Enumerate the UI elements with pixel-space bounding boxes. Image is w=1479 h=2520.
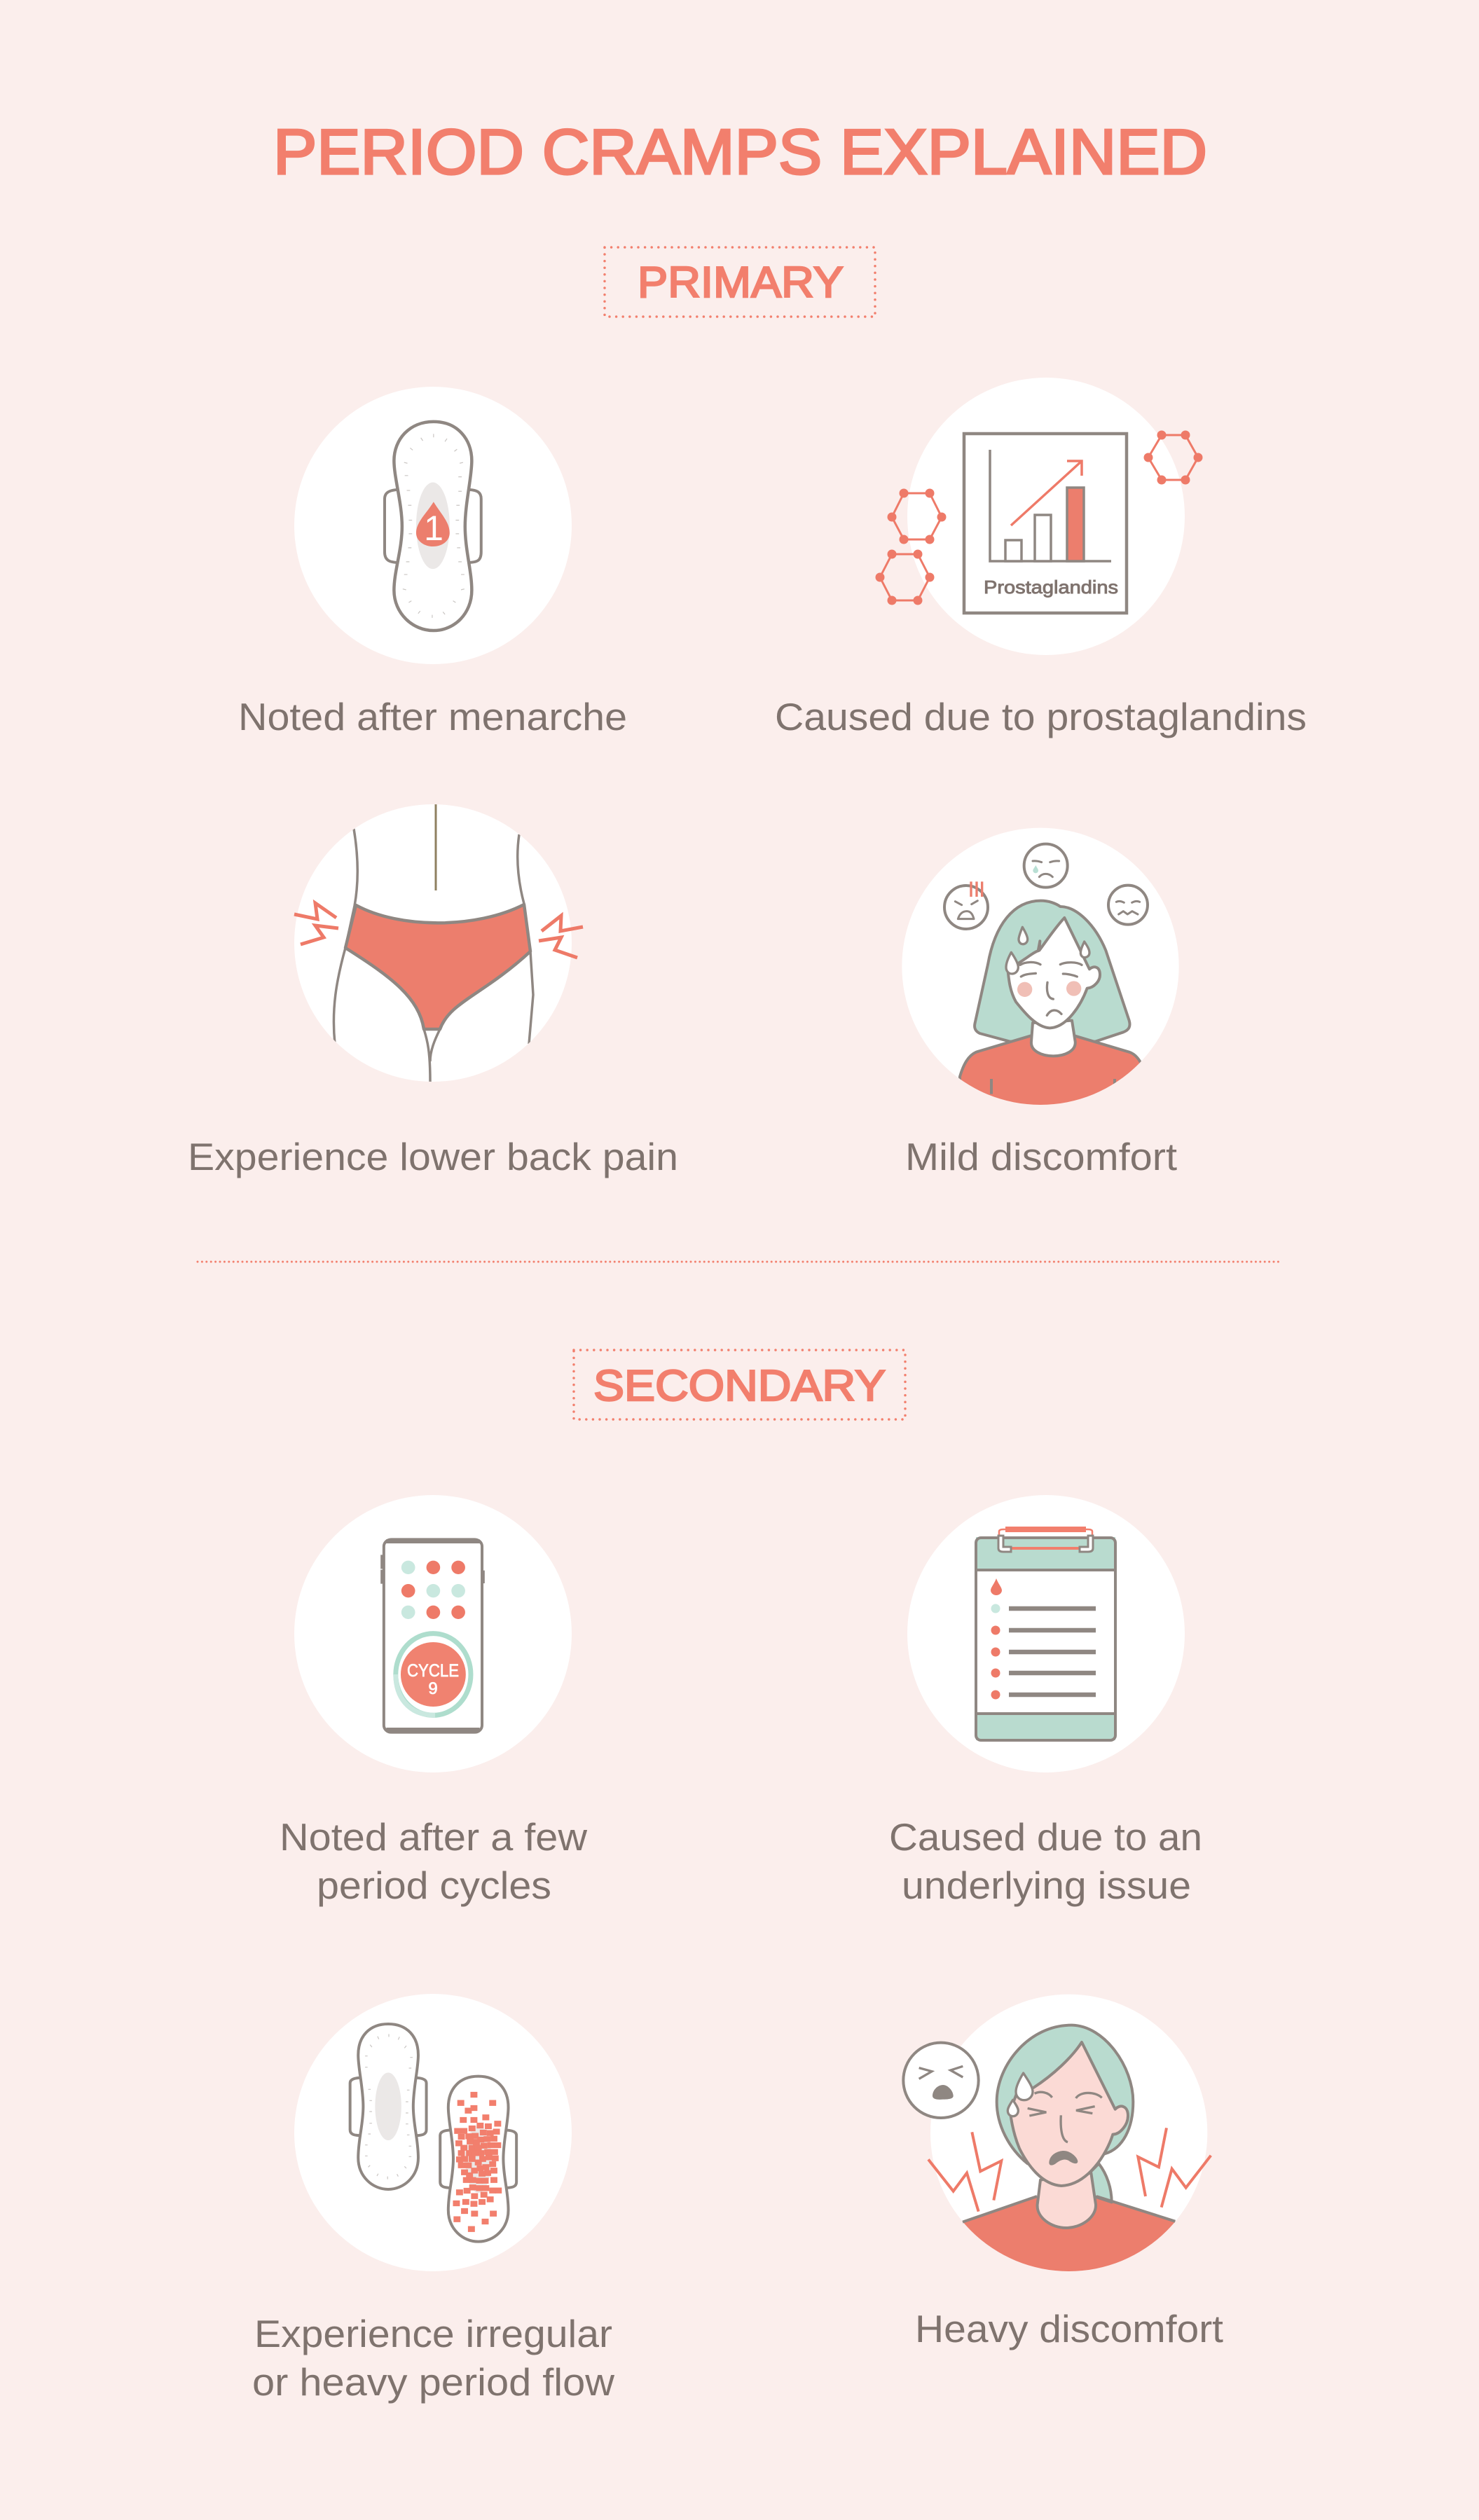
label: Experience irregular xyxy=(254,2312,612,2355)
label: Caused due to prostaglandins xyxy=(775,695,1307,738)
panel: noted after menarche xyxy=(238,387,627,738)
icon: shouting face xyxy=(903,2043,979,2118)
label xyxy=(889,1815,1202,1907)
icon: sanitary pad with blood drop xyxy=(294,387,572,664)
panel: experience lower back pain xyxy=(188,804,678,1178)
panel: caused due to an underlying issue xyxy=(889,1495,1202,1907)
icon: two sanitary pads xyxy=(294,1994,572,2271)
title: PERIOD CRAMPS EXPLAINED xyxy=(273,117,1207,188)
label xyxy=(252,2312,614,2404)
label xyxy=(280,1815,587,1907)
icon: phone with cycle tracker: 9 xyxy=(428,1679,438,1698)
icon: woman with mild discomfort xyxy=(902,828,1179,1123)
icon: pain lightning marks xyxy=(294,903,583,958)
icon: pain lightning marks xyxy=(928,2128,1211,2212)
icon: sanitary pad with blood drop: 1 xyxy=(424,509,443,548)
panel: noted after a few period cycles xyxy=(280,1495,587,1907)
icon: crying face xyxy=(1024,844,1068,888)
section heading: primary xyxy=(605,247,875,317)
label: underlying issue xyxy=(902,1864,1191,1907)
panel: heavy discomfort xyxy=(903,1995,1223,2350)
icon: clipboard xyxy=(907,1495,1185,1772)
icon: pad with heavy flow xyxy=(440,2077,516,2242)
label: Noted after menarche xyxy=(238,695,627,738)
icon: phone with cycle tracker: CYCLE xyxy=(407,1661,459,1681)
icon: clean pad xyxy=(350,2024,427,2189)
icon: molecule hexagons xyxy=(876,430,1202,605)
label: Mild discomfort xyxy=(905,1135,1177,1178)
icon: prostaglandins chart xyxy=(876,378,1202,655)
icon: worried face xyxy=(1108,886,1148,925)
label: Heavy discomfort xyxy=(915,2307,1223,2350)
panel: experience irregular or heavy period flow xyxy=(252,1994,614,2404)
panel: caused due to prostaglandins xyxy=(775,378,1307,738)
label: Experience lower back pain xyxy=(188,1135,678,1178)
label: or heavy period flow xyxy=(252,2360,614,2404)
label: Caused due to an xyxy=(889,1815,1202,1859)
icon: prostaglandins chart: Prostaglandins xyxy=(984,577,1118,598)
label: period cycles xyxy=(317,1864,551,1907)
label: Noted after a few xyxy=(280,1815,587,1859)
icon: lower body with underwear xyxy=(294,804,583,1082)
section heading: primary: PRIMARY xyxy=(638,259,844,307)
section heading: secondary xyxy=(574,1350,905,1419)
icon: angry face xyxy=(944,881,988,929)
section heading: secondary: SECONDARY xyxy=(593,1362,886,1410)
panel: mild discomfort xyxy=(902,828,1179,1178)
icon: phone with cycle tracker xyxy=(294,1495,572,1772)
icon: woman with heavy discomfort xyxy=(903,1995,1211,2277)
